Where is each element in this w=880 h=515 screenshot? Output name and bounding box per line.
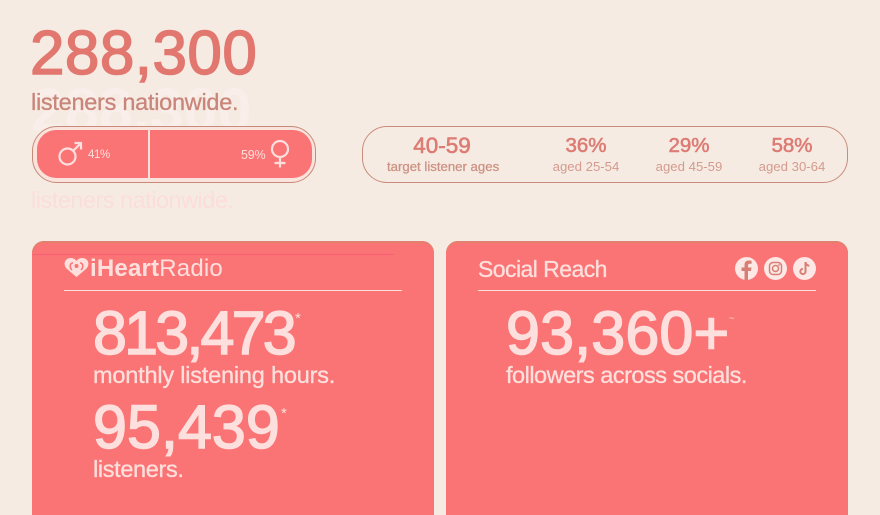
stat: followers: 93,360+ xyxy=(506,299,729,367)
stat: aged 25-54: aged 25-54 xyxy=(553,159,619,174)
icon: heart logo xyxy=(64,258,88,277)
stat: aged 30-64 xyxy=(759,134,825,174)
panel: social reach xyxy=(446,241,848,515)
stat: target ages xyxy=(387,133,499,174)
stat: followers: ~ xyxy=(729,313,734,323)
stat: target ages: target listener ages xyxy=(387,159,499,174)
stat: listeners: 95,439 xyxy=(93,393,280,461)
panel: iHeartRadio xyxy=(32,241,434,515)
stat: aged 45-59: 29% xyxy=(668,134,710,157)
icon: female symbol xyxy=(270,140,290,168)
stat: aged 25-54 xyxy=(553,134,619,174)
stat: aged 30-64: aged 30-64 xyxy=(759,159,825,174)
age statistics pill xyxy=(362,126,848,183)
gender bar xyxy=(37,130,312,178)
stat: listeners: * xyxy=(281,405,287,422)
stat: aged 45-59: aged 45-59 xyxy=(656,159,722,174)
stat: monthly listening hours xyxy=(93,299,335,388)
stat: aged 30-64: 58% xyxy=(771,134,813,157)
stat: monthly listening hours: monthly listening hours. xyxy=(93,362,335,388)
male percent: 41% xyxy=(88,149,110,161)
stat: listeners: listeners. xyxy=(93,456,184,482)
heading rule xyxy=(64,290,402,291)
headline number: 288,300 xyxy=(30,19,257,88)
ghost artifact: label echo: listeners nationwide. xyxy=(31,187,233,213)
icon: Facebook xyxy=(735,257,758,280)
icon: Instagram xyxy=(764,257,787,280)
icon: male symbol xyxy=(58,142,82,166)
female percent: 59% xyxy=(241,148,265,162)
stat: aged 25-54: 36% xyxy=(565,134,607,157)
heading rule xyxy=(478,290,816,291)
logo wordmark: iHeartRadio xyxy=(90,255,223,282)
headline label: listeners nationwide. xyxy=(31,89,238,115)
stat: monthly listening hours: * xyxy=(295,310,301,327)
stat: followers: followers across socials. xyxy=(506,362,747,388)
icon: TikTok xyxy=(793,257,816,280)
stat: aged 45-59 xyxy=(656,134,722,174)
gender split pill xyxy=(32,126,316,183)
panel heading: Social Reach xyxy=(478,256,607,282)
stat: monthly listening hours: 813,473 xyxy=(93,299,294,367)
ghost artifact: stray line xyxy=(32,254,394,255)
stat: target ages: 40-59 xyxy=(413,133,471,158)
divider between male and female xyxy=(148,130,150,178)
